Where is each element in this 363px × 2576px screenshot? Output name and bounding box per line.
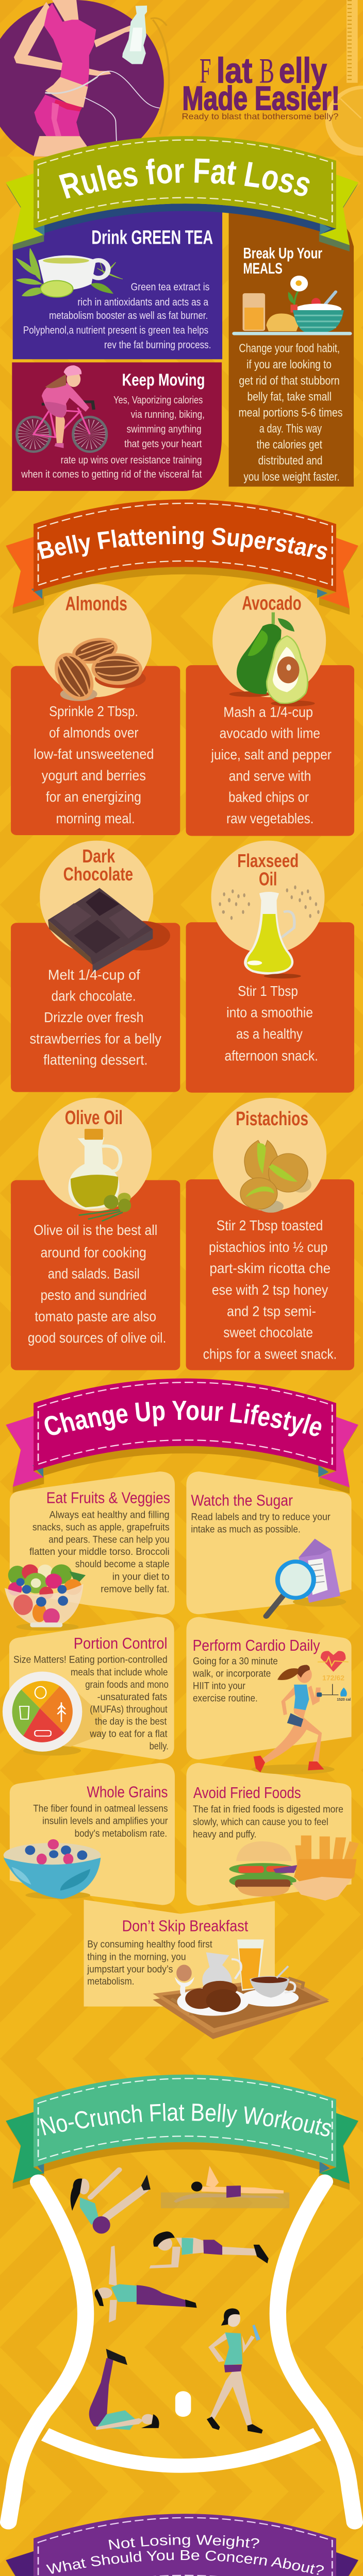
text block: portion control: the day is the best: [95, 1716, 167, 1727]
==== SEGMENT 6 ====: [3, 1539, 359, 1906]
text block: portion control: meals that include whole: [71, 1667, 168, 1677]
banner title: change up your lifestyle: Change Up Your Lifestyle: [44, 1401, 322, 1436]
text block: dark chocolate: [29, 968, 161, 1068]
heading: [243, 245, 322, 277]
banner: no-crunch flat belly workouts: [6, 2075, 358, 2190]
text block: eat fruits: snacks, such as apple, grapefruits: [32, 1522, 170, 1533]
card: flaxseed oil: [186, 922, 354, 1093]
text block: portion control: Size Matters! Eating portion-controlled: [13, 1654, 168, 1665]
text block: portion control: way to eat for a flat: [89, 1728, 168, 1739]
text block: belly fat, take small: [248, 390, 332, 403]
heading: don't skip breakfast: Don’t Skip Breakfast: [122, 1918, 249, 1935]
text block: dark chocolate: strawberries for a belly: [29, 1031, 161, 1047]
circle overlap: avocado: [213, 648, 325, 697]
circle: avocado: [212, 584, 326, 697]
text block: via running, biking,: [131, 409, 205, 420]
icon: chocolate bar: [48, 888, 170, 973]
text block: whole grains: [33, 1803, 168, 1839]
title: B: [259, 52, 274, 91]
text block: whole grains: insulin levels and amplifies your: [42, 1816, 168, 1826]
banner: belly flattening superstars: [6, 499, 358, 615]
text block: eat fruits: and pears. These can help you: [48, 1534, 170, 1545]
text block: swimming anything: [127, 423, 202, 435]
text block: almonds: for an energizing: [46, 789, 141, 805]
icon: oatmeal bowl: [4, 1839, 101, 1899]
==== SEGMENT 8 ====: [8, 2166, 355, 2522]
workout figure: lying on mat: [161, 2166, 289, 2208]
heading: eat fruits: Eat Fruits & Veggies: [46, 1489, 170, 1507]
icon: runner: [251, 1651, 351, 1774]
icon: olive oil bottle: [68, 1129, 131, 1221]
text block: olive oil: tomato paste are also: [35, 1309, 156, 1325]
circle: olive oil: [38, 1098, 152, 1211]
card: portion control: [9, 1617, 174, 1759]
text block: pistachios: pistachios into ½ cup: [209, 1240, 327, 1255]
heading: MEALS: [243, 260, 283, 277]
title: lat: [217, 50, 252, 90]
text block: Polyphenol,a nutrient present is green tea helps: [23, 324, 208, 336]
workout figure: v-sit: [71, 2170, 151, 2233]
text block: eat fruits: should become a staple: [75, 1559, 170, 1570]
text block: eat fruits: in your diet to: [112, 1571, 170, 1582]
icon: breakfast tray: [153, 1940, 329, 2039]
text block: pistachios: part-skim ricotta che: [209, 1261, 331, 1277]
text block: flaxseed oil: afternoon snack.: [225, 1048, 318, 1064]
card: pistachios: [186, 1179, 354, 1370]
icon: runner: 1520 cal: [337, 1697, 351, 1702]
icon: green tea cup: [16, 248, 123, 297]
text block: a day. This way: [259, 422, 322, 435]
text block: almonds: low-fat unsweetened: [34, 747, 154, 762]
text block: whole grains: body's metabolism rate.: [75, 1828, 167, 1839]
text block: whole grains: The fiber found in oatmeal lessens: [33, 1803, 168, 1814]
card: whole grains: [10, 1763, 175, 1905]
text block: pistachios: and 2 tsp semi-: [227, 1303, 316, 1319]
text block: flaxseed oil: [225, 984, 318, 1064]
heading: flaxseed oil: [237, 851, 299, 890]
header illustration: woman with bottle and tape: [0, 0, 363, 157]
heading: avoid fried foods: Avoid Fried Foods: [193, 1784, 301, 1802]
card: almonds: [11, 666, 180, 835]
text block: don't skip breakfast: By consuming healthy food first: [87, 1939, 212, 1950]
text block: watch the sugar: intake as much as possible.: [191, 1524, 301, 1535]
text block: portion control: belly.: [150, 1741, 169, 1752]
text block: flaxseed oil: as a healthy: [236, 1026, 303, 1042]
text block: rev the fat burning process.: [104, 339, 211, 350]
heading: dark chocolate: [63, 846, 133, 885]
banner title: belly flattening superstars: Belly Flattening Superstars: [37, 526, 327, 560]
icon: flaxseeds and oil jug: [219, 886, 320, 978]
text block: avocado: raw vegetables.: [226, 811, 314, 826]
heading: avocado: Avocado: [242, 592, 302, 614]
icon: fruit bowl: [5, 1564, 86, 1631]
circle: almonds: [38, 584, 152, 697]
circle: dark chocolate: [40, 841, 153, 954]
==== SEGMENT 9 ====: [6, 2514, 358, 2576]
banner title: not losing weight: [46, 2535, 324, 2575]
panel: drink green tea: [13, 205, 222, 359]
circle: flaxseed: [211, 841, 324, 954]
banner: rules for fat loss: [6, 136, 358, 251]
text block: olive oil: Olive oil is the best all: [34, 1223, 157, 1238]
text block: dark chocolate: Melt 1/4-cup of: [48, 968, 140, 983]
text block: don't skip breakfast: [87, 1939, 212, 1987]
text block: olive oil: pesto and sundried: [41, 1287, 146, 1303]
==== SEGMENT 7 ====: [6, 1900, 358, 2211]
banner title: no-crunch flat belly workouts: No-Crunch Flat Belly Workouts: [40, 2103, 331, 2136]
heading: Drink GREEN TEA: [91, 226, 213, 248]
text block: perform cardio: [192, 1656, 278, 1704]
text block: avocado: Mash a 1/4-cup: [223, 704, 313, 720]
subtitle: Ready to blast that bothersome belly?: [182, 111, 338, 121]
text block: that gets your heart: [124, 438, 202, 449]
workout figure: plank: [150, 2231, 269, 2268]
icon: cyclist: [17, 365, 107, 452]
heading: almonds: Almonds: [65, 592, 127, 615]
text block: Yes, Vaporizing calories: [113, 394, 203, 406]
banner title: rules for fat loss: Rules for Fat Loss: [59, 159, 309, 199]
panel: keep moving: [12, 362, 222, 491]
text block: avocado: [211, 704, 332, 826]
text block: olive oil: and salads. Basil: [48, 1266, 140, 1282]
==== SEGMENT 4 ====: [11, 968, 354, 1370]
heading: olive oil: Olive Oil: [65, 1106, 123, 1128]
text block: perform cardio: exercise routine.: [193, 1693, 258, 1704]
text block: perform cardio: walk, or incorporate: [192, 1668, 271, 1679]
icon: runner: 172/62: [322, 1674, 344, 1682]
text block: [21, 394, 205, 480]
text block: portion control: [13, 1654, 169, 1752]
==== SEGMENT 2 ====: [6, 362, 358, 666]
heading: portion control: Portion Control: [74, 1635, 168, 1652]
icon: pistachios: [240, 1140, 311, 1213]
text block: eat fruits: remove belly fat.: [101, 1584, 170, 1595]
text block: flaxseed oil: Stir 1 Tbsp: [238, 984, 298, 999]
text block: flaxseed oil: into a smoothie: [226, 1005, 313, 1021]
text block: portion control: -unsaturated fats: [97, 1692, 167, 1703]
==== SEGMENT 5 ====: [6, 1379, 358, 1615]
title: F: [200, 52, 211, 91]
text block: avocado: baked chips or: [228, 790, 309, 805]
icon: tape measure and stopwatch: [325, 0, 363, 156]
workout figure: standing with bottle: [207, 2309, 263, 2434]
heading: dark chocolate: Chocolate: [63, 865, 133, 885]
==== SEGMENT 1 ====: [0, 0, 363, 486]
banner title: not losing weight: Not Losing Weight?: [108, 2535, 259, 2550]
text block: the calories get: [256, 438, 322, 451]
text block: avoid fried foods: [193, 1804, 343, 1840]
text block: don't skip breakfast: metabolism.: [87, 1976, 134, 1987]
text block: pistachios: Stir 2 Tbsp toasted: [217, 1218, 323, 1234]
text block: eat fruits: Always eat healthy and filling: [50, 1510, 170, 1520]
text block: [23, 281, 211, 350]
text block: avocado: and serve with: [229, 768, 311, 784]
icon: burger and fries: [229, 1836, 359, 1901]
icon: breakfast shelf: [232, 276, 352, 335]
icon: food group plate: [3, 1672, 102, 1756]
text block: eat fruits: flatten your middle torso. Broccoli: [29, 1547, 170, 1557]
text block: olive oil: [28, 1223, 166, 1346]
circle overlap: almonds: [39, 648, 151, 697]
text block: perform cardio: HIIT into your: [193, 1681, 245, 1691]
title: elly: [279, 50, 327, 90]
card: avoid fried foods: [186, 1763, 352, 1906]
heading: dark chocolate: Dark: [82, 846, 115, 867]
belly outline: [8, 2181, 355, 2522]
text block: portion control: (MUFAs) throughout: [90, 1704, 168, 1715]
text block: olive oil: good sources of olive oil.: [28, 1330, 166, 1346]
text block: almonds: Sprinkle 2 Tbsp.: [49, 704, 138, 720]
text block: portion control: grain foods and mono: [85, 1679, 169, 1690]
heading: Keep Moving: [122, 370, 205, 389]
text block: dark chocolate: flattening dessert.: [43, 1053, 147, 1068]
heading: flaxseed oil: Flaxseed: [237, 851, 299, 871]
text block: pistachios: ese with 2 tsp honey: [212, 1282, 328, 1298]
text block: avoid fried foods: heavy and puffy.: [193, 1829, 256, 1840]
==== SEGMENT 3 ====: [11, 613, 354, 1093]
text block: watch the sugar: [191, 1512, 331, 1535]
text block: dark chocolate: Drizzle over fresh: [44, 1010, 143, 1026]
text block: rate up wins over resistance training: [61, 454, 202, 466]
icon: milk carton and magnifier: [266, 1539, 346, 1616]
card: avocado: [186, 665, 354, 836]
workout figure: side plank: [94, 2246, 197, 2323]
text block: Green tea extract is: [131, 281, 209, 293]
text block: don't skip breakfast: jumpstart your body’s: [87, 1964, 173, 1975]
icon: avocado: [229, 613, 315, 706]
text block: don't skip breakfast: thing in the morning, you: [87, 1952, 186, 1962]
card: olive oil: [11, 1180, 180, 1370]
banner: not losing weight: [6, 2514, 358, 2576]
text block: dark chocolate: dark chocolate.: [52, 989, 136, 1004]
card: eat fruits and veggies: [10, 1471, 175, 1615]
card: watch the sugar: [186, 1471, 352, 1614]
text block: metabolism booster as well as fat burner.: [49, 310, 208, 321]
text block: almonds: morning meal.: [56, 811, 135, 826]
text block: pistachios: sweet chocolate: [223, 1325, 313, 1341]
text block: eat fruits: [29, 1510, 170, 1595]
card: perform cardio daily: [186, 1617, 352, 1759]
icon: almonds: [47, 634, 146, 705]
text block: almonds: of almonds over: [49, 725, 139, 741]
text block: rich in antioxidants and acts as a: [77, 296, 208, 308]
text block: olive oil: around for cooking: [41, 1245, 146, 1261]
heading: whole grains: Whole Grains: [87, 1784, 168, 1801]
panel: break up your meals: [229, 205, 354, 487]
text block: [238, 342, 343, 484]
text block: avocado: avocado with lime: [220, 726, 320, 741]
workout figure: leg raise: [89, 2349, 159, 2430]
heading: flaxseed oil: Oil: [259, 869, 277, 890]
title: [182, 50, 340, 117]
text block: perform cardio: Going for a 30 minute: [193, 1656, 278, 1667]
text block: when it comes to getting rid of the visceral fat: [21, 468, 202, 480]
heading: watch the sugar: Watch the Sugar: [191, 1492, 293, 1510]
text block: almonds: yogurt and berries: [42, 768, 146, 784]
heading: perform cardio daily: Perform Cardio Daily: [193, 1637, 320, 1654]
card: dark chocolate: [11, 923, 180, 1092]
circle: pistachios: [213, 1098, 326, 1211]
banner: change up your lifestyle: [6, 1379, 358, 1494]
card: don't skip breakfast: [84, 1900, 275, 2007]
text block: distributed and: [258, 454, 322, 467]
text block: almonds: [34, 704, 154, 826]
heading: pistachios: Pistachios: [236, 1107, 308, 1129]
text block: watch the sugar: Read labels and try to reduce your: [191, 1512, 331, 1522]
text block: pistachios: [203, 1218, 337, 1362]
